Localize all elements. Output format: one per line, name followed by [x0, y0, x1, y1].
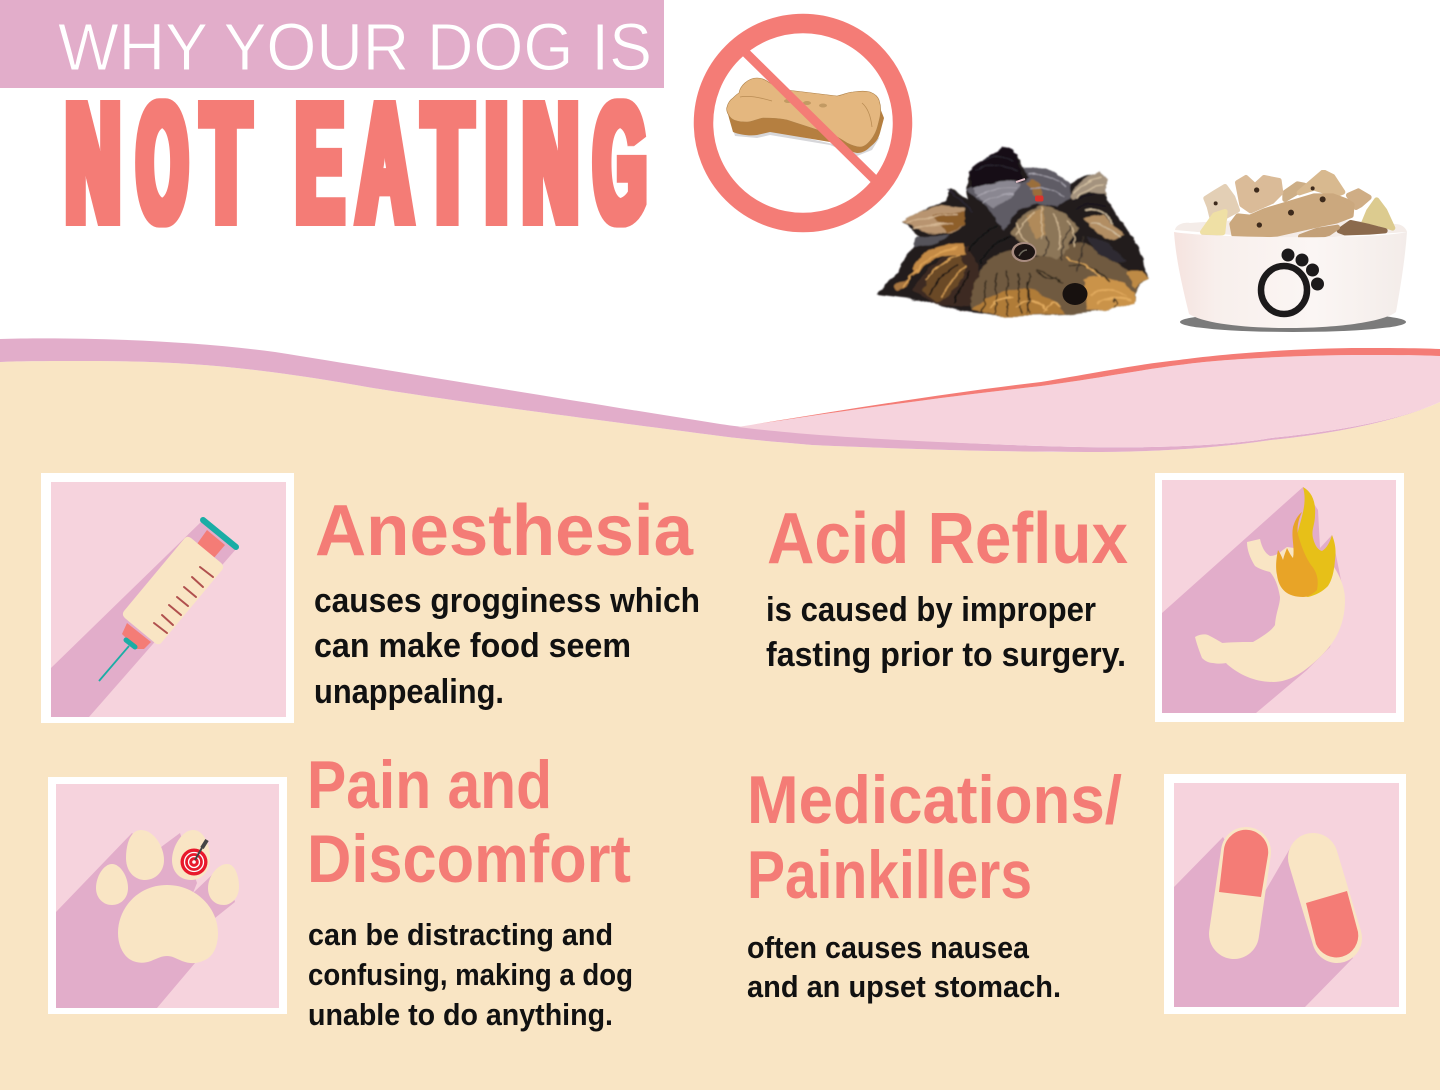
text: pain description: unable to do anything. [308, 997, 613, 1032]
title banner [0, 0, 664, 88]
photo: bowl of dog biscuits [1174, 172, 1407, 332]
dog hair tie [1035, 196, 1044, 202]
text: acid reflux description: fasting prior to surgery. [766, 636, 1126, 674]
text: anesthesia description: can make food seem [314, 627, 631, 665]
paw long shadow [56, 833, 235, 1008]
text: acid reflux description [766, 591, 1126, 674]
prohibition slash [743, 50, 878, 183]
icon: syringe [99, 520, 236, 681]
heading: Anesthesia: Anesthesia [315, 491, 694, 571]
biscuits [1203, 172, 1393, 237]
text: pain description: confusing, making a dog [308, 957, 633, 992]
text: medications description [747, 930, 1061, 1004]
icon: left capsule [1219, 830, 1268, 934]
bone crease lines [740, 96, 872, 127]
photo: sad yorkie puppy [877, 147, 1148, 317]
panel: pain and discomfort icon [48, 777, 287, 1014]
title line 2: T [423, 68, 472, 257]
icon: target with dart [180, 840, 208, 876]
text: G [594, 68, 646, 257]
heading: Pain and Discomfort: Discomfort [307, 821, 631, 897]
icon: no bone sign [704, 24, 902, 222]
cream background with wave [0, 338, 1440, 1090]
dog hair band [1016, 179, 1025, 182]
title line 2: E [296, 68, 343, 257]
prohibition ring [704, 24, 902, 222]
bowl inner rim [1175, 219, 1407, 240]
icon: right capsule [1306, 858, 1358, 957]
icon: stomach [1222, 539, 1345, 682]
heading: Pain and Discomfort [307, 747, 631, 897]
bone top [727, 78, 881, 147]
text: medications description: often causes nausea [747, 930, 1030, 965]
panel: acid reflux icon [1155, 473, 1404, 722]
title line 2: I [486, 68, 507, 257]
heading: Medications/ Painkillers: Medications/ [747, 762, 1122, 838]
text: acid reflux description: is caused by improper [766, 591, 1096, 629]
stomach long shadow [1162, 487, 1345, 713]
text: anesthesia description [314, 582, 700, 711]
heading: Acid Reflux: Acid Reflux [767, 499, 1128, 579]
icon: paw [96, 830, 239, 963]
pink wave band [0, 338, 1440, 452]
heading: Medications/ Painkillers: Painkillers [747, 837, 1032, 913]
syringe long shadow [51, 520, 237, 717]
pills long shadow [1174, 837, 1353, 1007]
panel: anesthesia icon [41, 473, 294, 723]
title line 2: O [137, 68, 187, 257]
icon: flame orange [1276, 512, 1318, 597]
bone side [727, 108, 884, 153]
bone holes [784, 99, 792, 103]
heading: Pain and Discomfort: Pain and [307, 747, 552, 823]
icon: flame yellow [1293, 487, 1336, 597]
coral wave line [738, 348, 1440, 427]
panel: medications icon [1164, 774, 1406, 1014]
heading: Medications/ Painkillers [747, 762, 1122, 913]
dog nose [1062, 283, 1088, 305]
title line 2: A [358, 68, 412, 257]
text: pain description: can be distracting and [308, 917, 613, 952]
light pink wave [738, 355, 1440, 447]
text: pain description [308, 917, 633, 1032]
text: anesthesia description: causes grogginess which [314, 582, 700, 620]
text: anesthesia description: unappealing. [314, 673, 504, 711]
bone soft shadow [730, 120, 880, 156]
title line 2: N [523, 68, 578, 257]
title line 1: WHY YOUR DOG IS [58, 10, 652, 85]
icon: stomach pylorus [1195, 634, 1230, 664]
title line 2: T [202, 68, 250, 257]
title line 2: N [66, 68, 120, 257]
bowl body [1174, 232, 1407, 328]
bowl shadow [1180, 312, 1406, 332]
dog eye [1012, 242, 1036, 262]
text: medications description: and an upset stomach. [747, 969, 1061, 1004]
logo: paw ring [1261, 248, 1324, 314]
